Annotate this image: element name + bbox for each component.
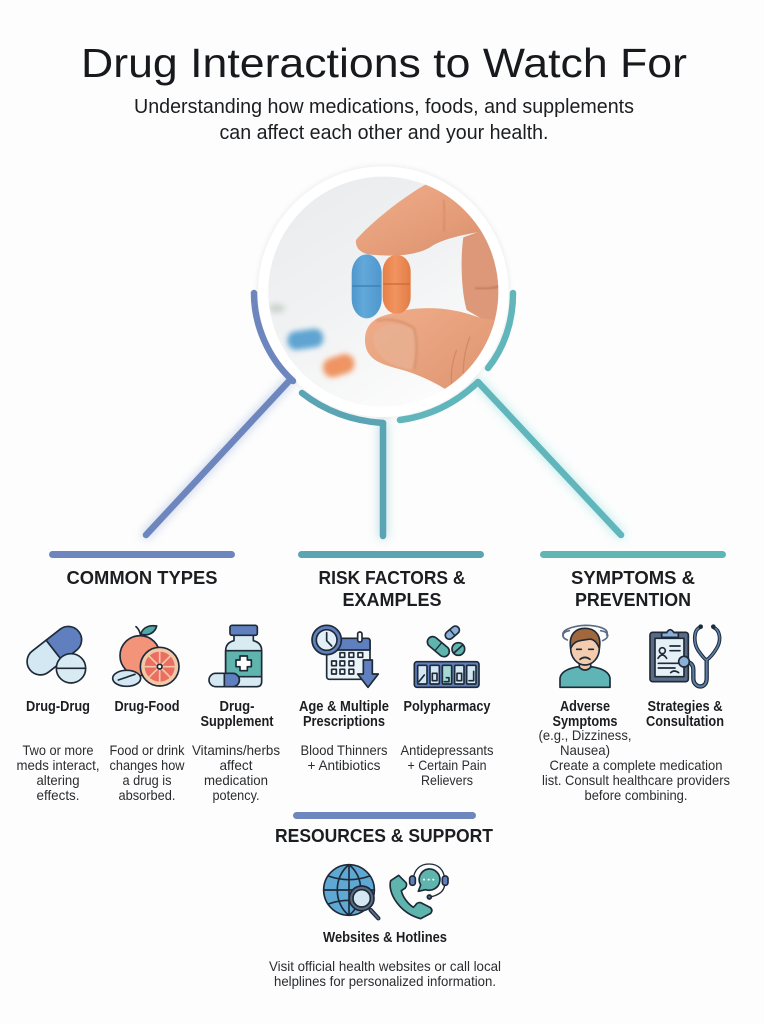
title: Drug Interactions to Watch For	[81, 40, 687, 86]
heading: risk factors: EXAMPLES	[342, 589, 442, 610]
text: drug-supplement description: affect	[220, 757, 253, 773]
text: drug-supplement description: Vitamins/herbs	[192, 742, 280, 758]
text: blood thinners example	[300, 742, 388, 773]
central photo	[257, 166, 509, 420]
icon: clock and calendar	[312, 625, 378, 687]
text: resources description: helplines for personalized information.	[274, 973, 496, 989]
heading: symptoms and prevention	[571, 567, 695, 610]
hand	[462, 231, 498, 326]
label: drug-drug: Drug-Drug	[26, 699, 90, 715]
label: drug-supplement: Drug-	[220, 699, 255, 715]
label: adverse symptoms	[552, 699, 618, 730]
heading: risk factors: RISK FACTORS &	[318, 567, 466, 588]
subtitle: Understanding how medications, foods, and supplements	[134, 96, 634, 118]
text: drug-drug description	[16, 742, 100, 803]
label: websites and hotlines: Websites & Hotlines	[323, 930, 447, 946]
text: resources description: Visit official health websites or call local	[269, 958, 501, 974]
text: antidepressants example: + Certain Pain	[408, 757, 486, 773]
panel: resources and support	[269, 812, 501, 989]
connector: glows	[146, 380, 621, 536]
text: drug-food description: absorbed.	[118, 787, 176, 803]
heading: common types: COMMON TYPES	[66, 567, 218, 588]
text: symptom examples: Nausea)	[560, 742, 610, 758]
text: prevention advice: list. Consult healthcare providers	[542, 772, 730, 788]
label: age and multiple prescriptions: Age & Multiple	[299, 699, 389, 715]
text: drug-drug description: Two or more	[22, 742, 94, 758]
subtitle	[134, 96, 634, 144]
panel: symptoms and prevention	[538, 551, 730, 803]
icon: drug-drug pills	[22, 621, 87, 683]
text: resources description	[269, 958, 501, 989]
connector: common types arc and line	[146, 293, 293, 535]
text: prevention advice	[542, 757, 730, 803]
label: drug-supplement	[200, 699, 274, 730]
text: drug-food description: Food or drink	[110, 742, 185, 758]
connector: risk factors arc and line	[302, 393, 383, 536]
text: drug-supplement description: medication	[204, 772, 268, 788]
icon: drug-supplement bottle	[209, 625, 262, 687]
text: prevention advice: before combining.	[584, 787, 688, 803]
subtitle: can affect each other and your health.	[220, 122, 548, 144]
icon: dizzy person	[560, 625, 610, 687]
text: drug-food description: changes how	[110, 757, 185, 773]
label: adverse symptoms: Adverse	[560, 699, 610, 715]
text: symptom examples	[538, 727, 632, 758]
label: strategies and consultation: Consultation	[646, 714, 724, 730]
label: strategies and consultation: Strategies &	[648, 699, 723, 715]
text: blood thinners example: + Antibiotics	[308, 757, 380, 773]
label: adverse symptoms: Symptoms	[552, 714, 618, 730]
text: blood thinners example: Blood Thinners	[300, 742, 388, 758]
icon: phone and headset	[390, 864, 448, 919]
icon: clipboard and stethoscope	[650, 624, 720, 686]
label: drug-food: Drug-Food	[114, 699, 180, 715]
icon: pills and organizer	[414, 624, 479, 687]
text: drug-supplement description	[192, 742, 280, 803]
text: antidepressants example: Antidepressants	[400, 742, 494, 758]
pills	[383, 255, 411, 314]
label: drug-supplement: Supplement	[200, 714, 274, 730]
label: strategies and consultation	[646, 699, 724, 730]
text: drug-food description: a drug is	[122, 772, 172, 788]
text: antidepressants example: Relievers	[421, 772, 473, 788]
icon: globe with magnifier	[324, 865, 378, 918]
text: drug-supplement description: potency.	[212, 787, 260, 803]
panel: risk factors and examples	[298, 551, 494, 788]
text: drug-drug description: meds interact,	[16, 757, 100, 773]
heading: resources and support: RESOURCES & SUPPORT	[275, 825, 494, 846]
text: antidepressants example	[400, 742, 494, 788]
text: prevention advice: Create a complete medication	[550, 757, 722, 773]
text: drug-drug description: effects.	[36, 787, 80, 803]
heading: symptoms and prevention: PREVENTION	[575, 589, 691, 610]
connector: symptoms arcs and line	[400, 293, 621, 535]
label: age and multiple prescriptions	[299, 699, 389, 730]
text: symptom examples: (e.g., Dizziness,	[538, 727, 632, 743]
label: age and multiple prescriptions: Prescriptions	[303, 714, 385, 730]
text: drug-drug description: altering	[36, 772, 80, 788]
label: polypharmacy: Polypharmacy	[404, 699, 490, 715]
panel: common types	[16, 551, 280, 803]
heading: symptoms and prevention: SYMPTOMS &	[571, 567, 695, 588]
heading: risk factors	[318, 567, 466, 610]
icon: drug-food fruit	[113, 626, 179, 686]
text: drug-food description	[110, 742, 185, 803]
